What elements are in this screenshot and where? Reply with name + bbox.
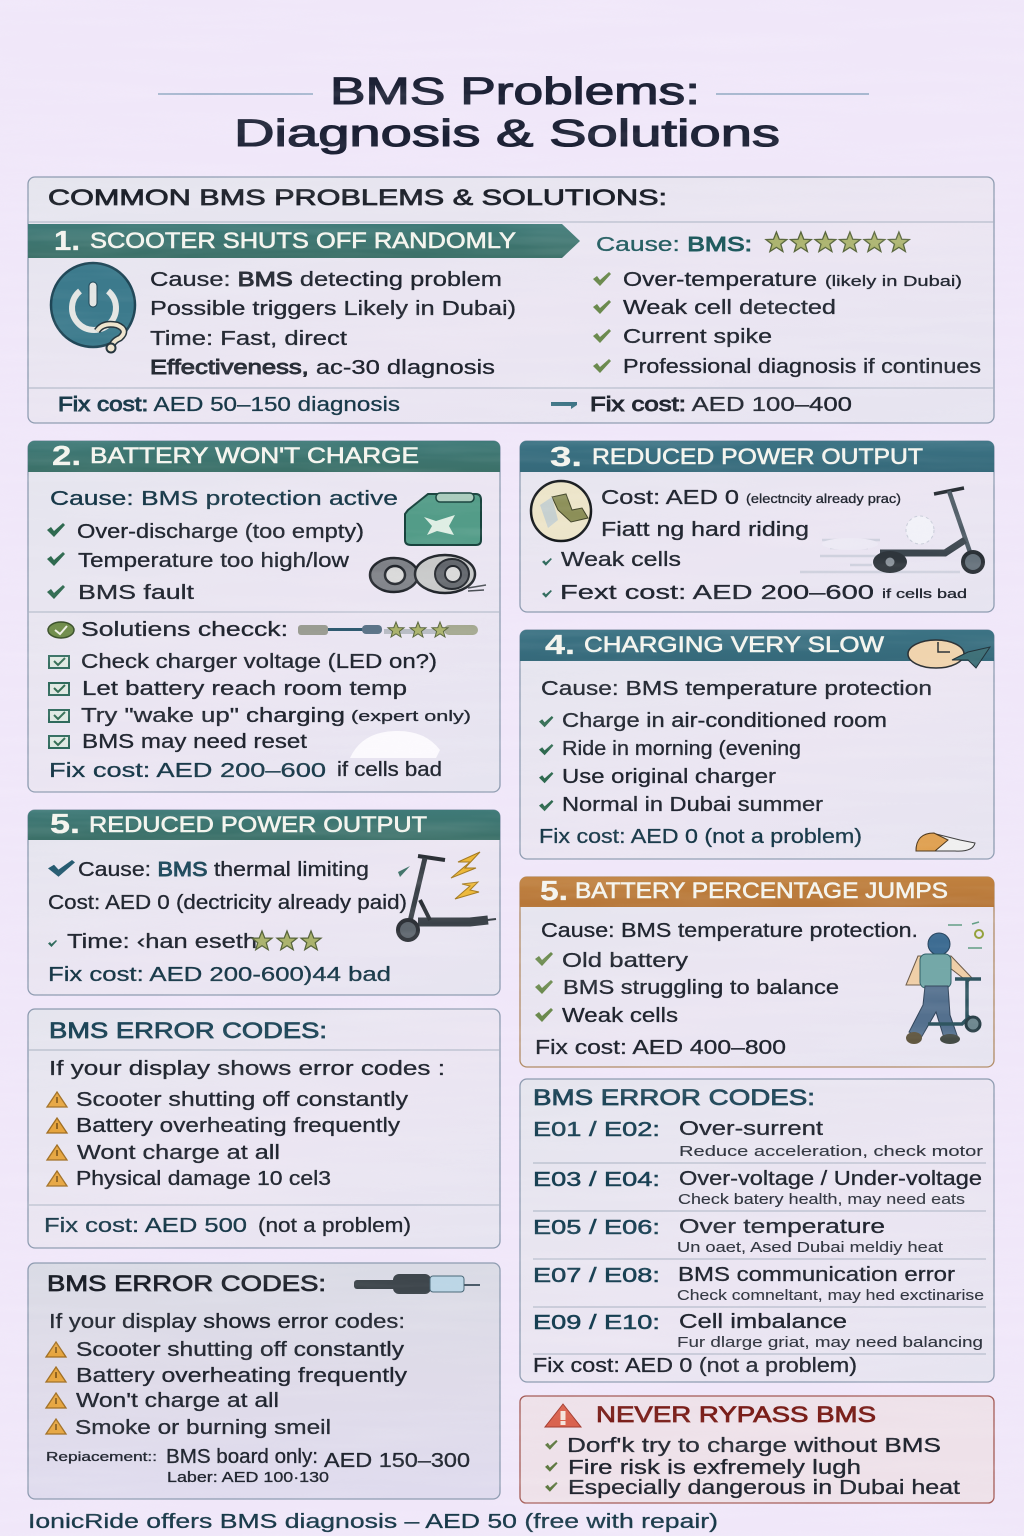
warning list: Fire risk is exfremely lugh — [568, 1457, 861, 1479]
header band: 2. — [52, 440, 81, 471]
fix cost: (not a problem) — [258, 1215, 411, 1237]
footer note: IonicRide offers BMS diagnosis – AED 50 (free with repair) — [28, 1511, 718, 1533]
warning list: Smoke or burning smeil — [75, 1417, 331, 1439]
code row E03/E04 — [533, 1168, 982, 1208]
panel: common BMS problems and problem 1 — [28, 177, 994, 423]
header band — [520, 875, 994, 907]
panel: problem 4 charging very slow — [520, 629, 994, 859]
checklist: Charge in air-conditioned room — [562, 710, 887, 732]
checklist: triggers: Professional diagnosis if continues — [623, 356, 981, 378]
code row E05/E06: E05 / E06: — [533, 1217, 660, 1239]
code row E09/E10: Fur dlarge griat, may need balancing — [677, 1334, 983, 1351]
checklist: solutions — [49, 651, 471, 753]
intro: If your display shows error codes: — [49, 1311, 405, 1333]
header band: BATTERY WON'T CHARGE — [90, 443, 419, 468]
panel: BMS error codes replacement — [28, 1263, 500, 1499]
fix cost: Fix cost: AED 500 — [44, 1215, 247, 1237]
fix cost: Fix cost: AED 0 (not a problem) — [539, 826, 862, 848]
panel: problem 2 battery won't charge — [28, 440, 500, 792]
checklist: solutions: Try "wake up" charging — [81, 705, 345, 727]
code row E07/E08: E07 / E08: — [533, 1265, 660, 1287]
time line with stars — [48, 931, 321, 953]
problem 1 header ribbon: 1. — [54, 225, 80, 256]
solutions heading with badge: Solutiens checck: — [81, 619, 288, 641]
code row E03/E04: E03 / E04: — [533, 1169, 660, 1191]
time line with stars: Time: ‹han eseth — [67, 931, 257, 953]
weak cells item: Weak cells — [561, 549, 681, 571]
title — [158, 71, 869, 155]
checklist: solutions: (expert only) — [351, 708, 471, 725]
checklist: causes: Over-discharge (too empty) — [77, 521, 364, 543]
warning list: Scooter shutting off constantly — [76, 1089, 408, 1111]
warning list: Physical damage 10 cel3 — [76, 1168, 331, 1190]
header band — [520, 441, 994, 472]
header band: 3. — [550, 441, 582, 472]
code row E09/E10: E09 / E10: — [533, 1312, 660, 1334]
code row E09/E10 — [533, 1311, 983, 1351]
title: BMS Problems: — [330, 71, 700, 113]
icon: battery cells — [370, 555, 486, 593]
icon: power button with question mark — [51, 263, 135, 352]
panel: BMS error codes warning signs — [28, 1009, 500, 1248]
white smudge — [350, 731, 440, 758]
checklist: Weak cells — [562, 1005, 678, 1027]
icon: scooter with lightning — [398, 852, 496, 940]
checklist: triggers: Current spike — [623, 326, 772, 348]
header band — [28, 440, 500, 472]
cause: Cause: BMS temperature protection. — [541, 920, 918, 942]
fix cost left: Fix cost: AED 50–150 diagnosis — [58, 394, 400, 416]
cause and triggers text: Cause: BMS detecting problem — [150, 269, 502, 291]
cause and triggers text — [150, 269, 516, 379]
section heading: COMMON BMS PROBLEMS & SOLUTIONS: — [48, 185, 667, 210]
cause and triggers text: Effectiveness, ac-30 dlagnosis — [150, 357, 495, 379]
code row E01/E02: Reduce acceleration, check motor — [679, 1143, 983, 1160]
weak cells item — [542, 549, 681, 571]
code row E07/E08 — [533, 1264, 984, 1304]
fix cost — [44, 1215, 411, 1237]
code row E01/E02: E01 / E02: — [533, 1119, 660, 1141]
warning list: Won't charge at all — [76, 1390, 279, 1412]
replacement costs: Repiacement:: — [46, 1449, 157, 1464]
icon: gauge circle — [531, 481, 591, 541]
code row E03/E04: Check batery health, may need eats — [678, 1191, 965, 1208]
replacement costs: Laber: AED 100·130 — [167, 1469, 329, 1486]
warning list: Battery overheating frequently — [76, 1365, 407, 1387]
header band: 5. — [50, 808, 80, 839]
solutions heading with badge — [48, 619, 478, 641]
header band: BATTERY PERCENTAGE JUMPS — [575, 878, 948, 903]
warning heading — [545, 1402, 876, 1427]
warning list — [47, 1089, 408, 1190]
code row E05/E06: Over temperature — [679, 1216, 885, 1238]
icon: worn cell — [916, 833, 975, 851]
warning list: Especially dangerous in Dubai heat — [568, 1477, 961, 1499]
icon: scooter with speed lines — [800, 488, 983, 573]
code row E07/E08: Check comneltant, may hed exctinarise — [677, 1287, 984, 1304]
cause line with check: Cause: BMS thermal limiting — [78, 859, 369, 881]
checklist: causes: BMS fault — [78, 582, 195, 604]
panel: problem 3 reduced power output — [520, 441, 994, 612]
warning list — [46, 1339, 407, 1439]
cause rating with stars — [596, 232, 909, 256]
code row E05/E06 — [533, 1216, 944, 1256]
checklist: solutions: Let battery reach room temp — [82, 678, 407, 700]
checklist: BMS struggling to balance — [563, 977, 839, 999]
checklist: Ride in morning (evening — [562, 738, 801, 760]
checklist: causes: Temperature too high/low — [78, 550, 350, 572]
code row E01/E02 — [533, 1118, 983, 1160]
icon: small arrow — [551, 402, 577, 409]
cost text — [601, 487, 901, 541]
replacement costs: BMS board only: — [166, 1446, 318, 1468]
icon: BMS tool — [354, 1274, 480, 1294]
icon: rider with scooter — [906, 922, 983, 1044]
cause line: Cause: BMS protection active — [50, 488, 398, 510]
checklist: triggers — [593, 269, 981, 378]
checklist: Old battery — [562, 950, 688, 972]
checklist: triggers: Over-temperature — [623, 269, 817, 291]
header band: REDUCED POWER OUTPUT — [89, 812, 427, 837]
checklist: Normal in Dubai summer — [562, 794, 823, 816]
header band: REDUCED POWER OUTPUT — [592, 444, 923, 469]
fix cost right: Fix cost: AED 100–400 — [590, 394, 852, 416]
warning list: Battery overheating frequently — [76, 1115, 400, 1137]
cause and triggers text: Possible triggers Likely in Dubai) — [150, 298, 516, 320]
code row E01/E02: Over-surrent — [679, 1118, 824, 1140]
checklist: triggers: (likely in Dubai) — [825, 273, 962, 290]
panel: BMS error code list — [520, 1079, 994, 1382]
fix cost: Fix cost: AED 0 (not a problem) — [533, 1355, 857, 1377]
header band: CHARGING VERY SLOW — [584, 632, 884, 657]
fix cost: Fext cost: AED 200–600 — [560, 582, 874, 604]
icon: clock and plug — [908, 640, 990, 668]
cause and triggers text: Time: Fast, direct — [150, 328, 348, 350]
code row E03/E04: Over-voltage / Under-voltage — [679, 1168, 982, 1190]
header band: 5. — [540, 875, 568, 906]
header band: 4. — [545, 629, 575, 660]
warning list — [545, 1435, 961, 1499]
title: Diagnosis & Solutions — [234, 113, 780, 155]
warning list: Dorf'k try to charge without BMS — [567, 1435, 941, 1457]
checklist: triggers: Weak cell detected — [623, 297, 836, 319]
checklist — [539, 710, 887, 816]
code row E09/E10: Cell imbalance — [679, 1311, 847, 1333]
warning heading: NEVER RYPASS BMS — [596, 1402, 876, 1427]
checklist: causes — [47, 521, 364, 604]
heading: BMS ERROR CODES: — [533, 1085, 815, 1110]
heading: BMS ERROR CODES: — [47, 1271, 326, 1296]
cause: Cause: BMS temperature protection — [541, 678, 932, 700]
header band — [28, 808, 500, 840]
checklist: solutions: BMS may need reset — [82, 731, 308, 753]
fix cost: if cells bad — [882, 586, 967, 601]
checklist: Use original charger — [562, 766, 776, 788]
code row E07/E08: BMS communication error — [678, 1264, 955, 1286]
fix cost — [542, 582, 967, 604]
problem 1 header ribbon: SCOOTER SHUTS OFF RANDOMLY — [90, 228, 516, 253]
problem 1 header ribbon — [28, 224, 580, 258]
fix cost: Fix cost: AED 400–800 — [535, 1037, 786, 1059]
fix cost: if cells bad — [337, 759, 442, 781]
replacement costs — [46, 1446, 470, 1486]
header band — [520, 629, 994, 661]
panel: problem 5 battery percentage jumps — [520, 875, 994, 1067]
code row E05/E06: Un oaet, Ased Dubai meldiy heat — [677, 1239, 944, 1256]
warning list: Scooter shutting off constantly — [76, 1339, 404, 1361]
panel: problem 5 reduced power output — [28, 808, 500, 995]
intro: If your display shows error codes : — [49, 1058, 445, 1080]
cost text: Fiatt ng hard riding — [601, 519, 809, 541]
checklist — [535, 950, 839, 1027]
panel: never bypass BMS warning — [520, 1396, 994, 1503]
fix cost: Fix cost: AED 200–600 — [49, 760, 326, 782]
fix cost — [49, 759, 442, 782]
fix cost: Fix cost: AED 200-600)44 bad — [48, 964, 391, 986]
replacement costs: AED 150–300 — [324, 1450, 470, 1472]
cost text: (electncity already prac) — [746, 491, 901, 506]
cost text: Cost: AED 0 — [601, 487, 739, 509]
icon: battery canister — [405, 493, 481, 545]
heading: BMS ERROR CODES: — [49, 1018, 327, 1043]
warning list: Wont charge at all — [77, 1142, 280, 1164]
checklist: solutions: Check charger voltage (LED on?) — [81, 651, 437, 673]
cause rating with stars: Cause: BMS: — [596, 234, 752, 256]
cost line: Cost: AED 0 (dectricity already paid) — [48, 892, 407, 914]
